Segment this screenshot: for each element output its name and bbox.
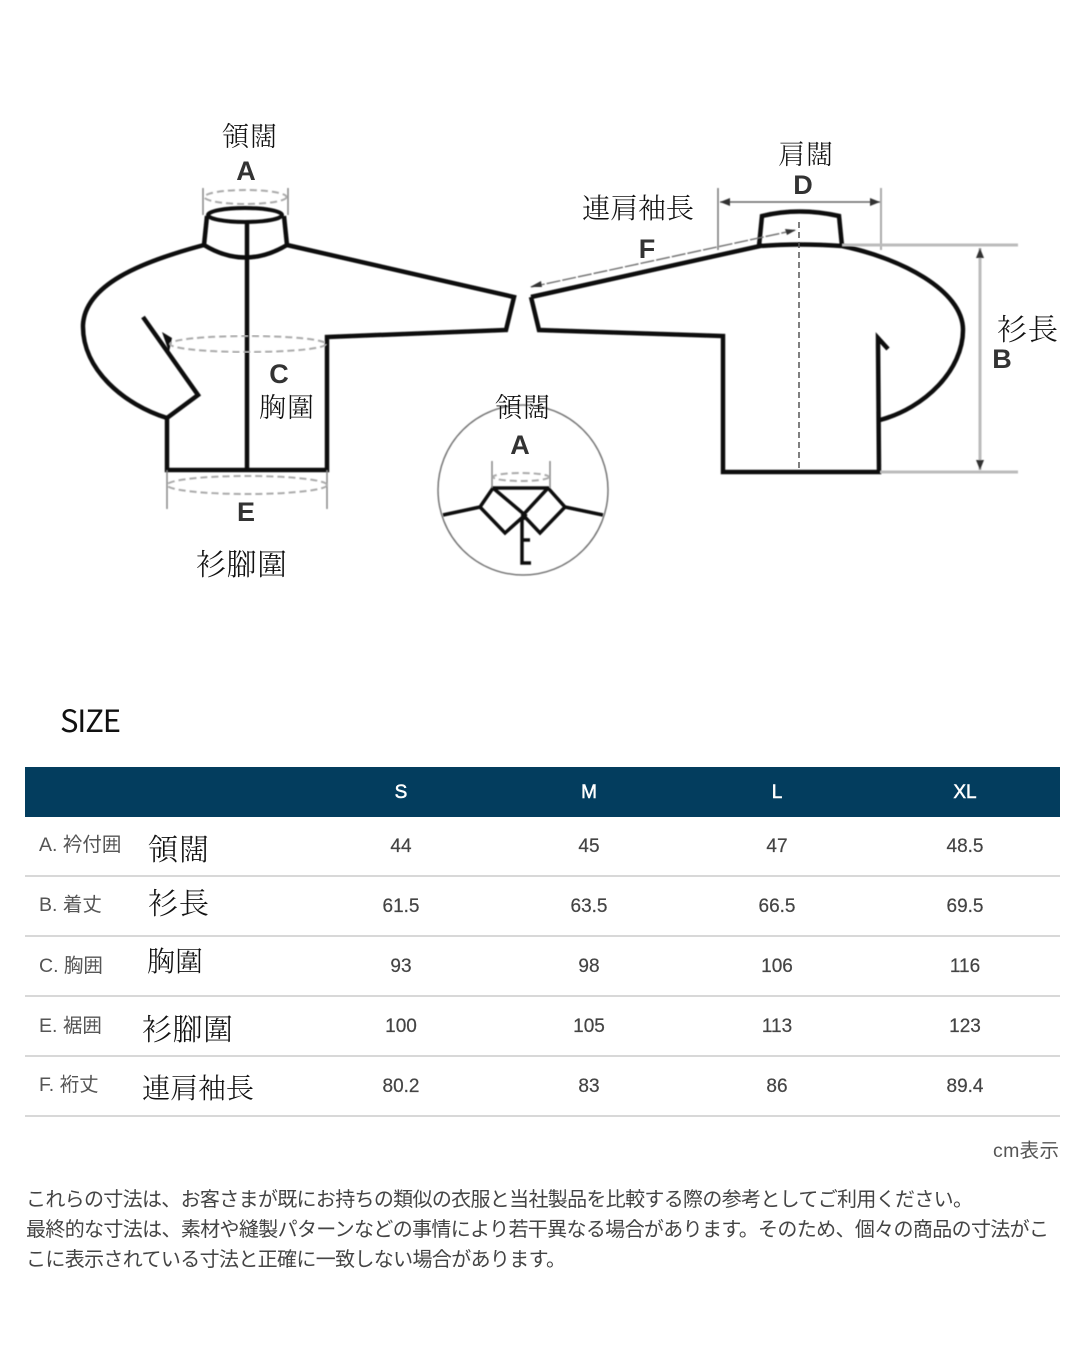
label: E: E [237, 497, 255, 527]
row: F: 83 [578, 1076, 600, 1097]
row: F: F. 裄丈 [39, 1074, 99, 1096]
neck width measure [203, 188, 288, 215]
label: F: F [639, 234, 655, 264]
row: C: 93 [390, 956, 412, 977]
label: C: C [269, 359, 289, 389]
diagram: front view of jacket [83, 115, 514, 584]
shoulder width arrow [718, 188, 881, 250]
row: E: 113 [762, 1016, 792, 1037]
row: B: B. 着丈 [39, 894, 102, 916]
heading: SIZE: SIZE [60, 696, 121, 741]
diagram: collar detail [438, 386, 608, 575]
label: shoulder width: 肩闊 [778, 133, 833, 172]
diagram: back view of jacket [530, 133, 1058, 472]
chest measure [170, 336, 326, 352]
row: A: 47 [766, 836, 788, 857]
table header: M [581, 782, 597, 803]
table header [25, 767, 1060, 817]
hem measure [167, 470, 327, 509]
row: A: 45 [578, 836, 600, 857]
row: E [39, 1005, 981, 1049]
row: C: C. 胸囲 [39, 955, 103, 977]
unit note: cm表示 [993, 1140, 1059, 1162]
row: E: 100 [385, 1016, 417, 1037]
table header: S [395, 782, 407, 803]
row: A: A. 衿付囲 [39, 834, 121, 856]
detail circle [438, 405, 608, 575]
disclaimer text: 最終的な寸法は、素材や縫製パターンなどの事情により若干異なる場合があります。そのため、個々の商品の寸法がこ [26, 1218, 1049, 1241]
row: E: 105 [573, 1016, 605, 1037]
table header: L [772, 782, 782, 803]
centre back dashed line [798, 222, 800, 472]
table header: XL [953, 782, 977, 803]
row: B: 61.5 [383, 896, 419, 917]
row: C: 98 [578, 956, 600, 977]
label: D: D [793, 170, 813, 200]
row: E: E. 裾囲 [39, 1015, 102, 1037]
disclaimer text: こに表示されている寸法と正確に一致しない場合があります。 [26, 1248, 566, 1271]
row: F: 86 [766, 1076, 788, 1097]
label: body length: 衫長 [997, 305, 1058, 349]
row: A: 48.5 [947, 836, 983, 857]
row: B [39, 879, 983, 923]
row: A: 44 [390, 836, 412, 857]
row: B: 69.5 [947, 896, 983, 917]
label: neck width: 領闊 [222, 115, 277, 154]
row: B: 衫長 [148, 879, 209, 923]
label: sleeve length: 連肩袖長 [582, 187, 694, 227]
row: A [39, 825, 983, 869]
disclaimer text [26, 1188, 1049, 1271]
row: F: 89.4 [947, 1076, 984, 1097]
row: E: 衫腳圍 [142, 1005, 233, 1049]
row: E: 123 [949, 1016, 981, 1037]
row: C: 胸圍 [147, 940, 203, 980]
label: A: A [236, 156, 256, 186]
label: B: B [992, 344, 1012, 374]
row: F [39, 1067, 984, 1107]
row: B: 63.5 [571, 896, 607, 917]
jacket back outline [531, 212, 963, 472]
jacket front outline [83, 208, 514, 470]
row: C [39, 940, 980, 980]
row: F: 連肩袖長 [142, 1067, 254, 1107]
row: A: 領闊 [148, 825, 209, 869]
row: C: 116 [950, 956, 980, 977]
sleeve length arrow [530, 229, 796, 287]
row: B: 66.5 [759, 896, 795, 917]
row: F: 80.2 [383, 1076, 419, 1097]
disclaimer text: これらの寸法は、お客さまが既にお持ちの類似の衣服と当社製品を比較する際の参考としてご利用ください。 [26, 1188, 973, 1211]
size table [25, 767, 1060, 1116]
label: A: A [510, 430, 530, 460]
row: C: 106 [761, 956, 793, 977]
label: hem: 衫腳圍 [196, 540, 287, 584]
collar measure [492, 461, 550, 488]
body length arrow [842, 245, 1018, 472]
collar outline [443, 488, 603, 563]
label: neck width: 領闊 [495, 386, 550, 425]
label: chest: 胸圍 [259, 386, 314, 425]
